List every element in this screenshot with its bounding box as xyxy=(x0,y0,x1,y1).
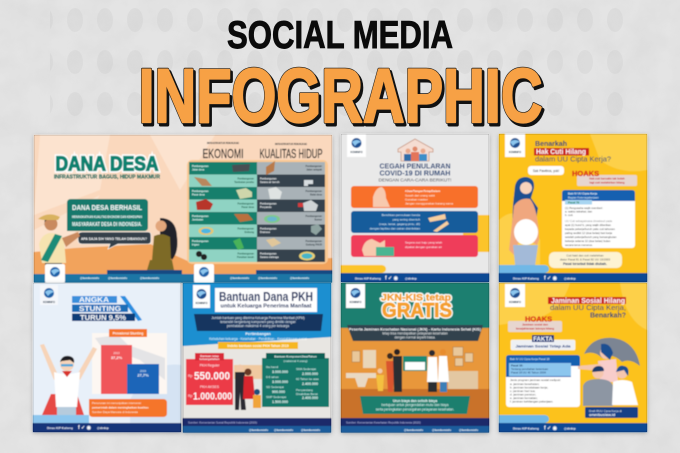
stamp: hoaks xyxy=(572,169,637,186)
icon: kominfo logo: KOMINFO xyxy=(509,301,521,304)
speech bubble: apa saja xyxy=(78,232,151,249)
document card: pasal 79: Bab IV UU Cipta Kerja xyxy=(568,192,598,196)
blue header area xyxy=(183,283,331,346)
document card: pasal 79: paling sedikit 12 (dua belas) hari kerja xyxy=(565,231,613,235)
table rows: ekonomi: Tambatan perahu xyxy=(234,181,255,184)
text band: urun biaya: serta peningkatan pencegahan pelayanan kesehatan. xyxy=(376,408,454,412)
panel: bantuan komponen: SMA Sederajat xyxy=(296,367,316,371)
icon: kominfo logo: KOMINFO xyxy=(43,301,55,304)
icon: kominfo logo: KOMINFO xyxy=(350,301,361,304)
text band: peserta JKN: tetap bisa mendapatkan pelayanan kesehatan xyxy=(382,332,448,336)
text band: urun biaya: bertujuan untuk pengendalian mutu dan biaya xyxy=(382,403,449,407)
pale blue shape xyxy=(130,364,181,423)
card: orange isolation: Susah dari orang sakit xyxy=(405,194,435,198)
panel: bantuan tetap xyxy=(186,353,233,405)
document card: pasal 18: d. jaminan pensiun; xyxy=(510,392,536,396)
heading: jaminan sosial hilang: Jaminan Sosial Hilang xyxy=(551,298,625,305)
footer: social handles: @kemkominfo xyxy=(290,276,309,280)
footer: social handles xyxy=(341,273,489,282)
panel: bantuan tetap: 1.000.000 xyxy=(193,390,232,402)
document card: pasal 79: Bagian Ketenagakerjaan xyxy=(568,196,599,200)
heading: cegah penularan xyxy=(378,164,452,184)
footer: social handles: @kemkominfo xyxy=(459,428,478,432)
document card: pasal 79: bekerja selama 12 (dua belas) bulan xyxy=(565,239,611,243)
document card: pasal 18: c. jaminan hari tua; xyxy=(510,389,536,393)
lighter yellow blobs xyxy=(499,283,647,330)
icon: kominfo logo: KOMINFO xyxy=(196,302,207,305)
footer: social handles: @dinkip xyxy=(97,426,109,430)
table rows: ekonomi: Pembangunan xyxy=(192,240,209,243)
floor area xyxy=(341,389,489,419)
bubble: pasal tersebut tidak diubah: Pasal tersebut tidak diubah. xyxy=(563,262,607,266)
speech bubble: dana desa berhasil xyxy=(67,199,148,231)
panel: bantuan komponen: Bantuan Komponen/Jiwa/Tahun xyxy=(274,354,317,358)
stamp: fakta: Jaminan Sosial Tetap Ada xyxy=(516,344,571,348)
source strip: Sumber: Kementerian Kesehatan Republik Indonesia (2020) xyxy=(346,420,421,424)
text band: urun biaya: Urun biaya dan selisih biaya xyxy=(393,399,437,403)
icon: kominfo logo xyxy=(40,285,58,305)
document card: pasal 79: Pasal 79 xyxy=(568,200,580,204)
footer: social handles: @kemkominfo xyxy=(230,276,249,280)
stamp: hoaks: HOAKS xyxy=(525,314,552,324)
yellow accent behind cards xyxy=(463,215,489,252)
infrastructure table: INFRASTRUKTUR PENUNJANG xyxy=(207,141,239,145)
heading: DANA DESA: DANA DESA xyxy=(56,154,158,176)
heading: jaminan sosial hilang: dalam UU Cipta Kerja, xyxy=(550,305,626,312)
heading: DANA DESA: DANA DESA xyxy=(56,154,158,176)
panel: bantuan dana PKH xyxy=(183,283,331,432)
panel: bantuan komponen: Ibu hamil xyxy=(266,365,279,369)
heading: benarkah hak cuti hilang: Benarkah xyxy=(535,141,567,148)
panel: JKN-KIS tetap gratis xyxy=(341,283,489,432)
heading: benarkah hak cuti hilang xyxy=(534,141,611,164)
bar chart: prevalensi stunting: 2019 xyxy=(140,369,147,373)
panel: bantuan komponen: 900.000 xyxy=(272,390,285,394)
illustration: pregnant woman xyxy=(509,177,539,273)
table rows: kualitas hidup: Pembangunan xyxy=(306,215,323,218)
footer: social handles: @kemkominfo xyxy=(249,428,268,432)
callout: orange: pemerintah dalam meningkatkan kualitas xyxy=(92,406,149,410)
stamp: hoaks: Hak cuti bersalin tak boleh xyxy=(589,176,625,180)
text band: jumlah bantuan: Pertimbangan xyxy=(245,332,271,336)
callout: orange: Sumber Daya Manusia di Indonesia xyxy=(92,410,138,414)
table rows: kualitas hidup: Drainase xyxy=(260,231,271,234)
panel: jaminan sosial hilang xyxy=(499,283,647,432)
text band: jumlah bantuan: Jumlah bantuan yang diterima Keluarga Penerima Manfaat (KPM) xyxy=(211,316,305,320)
panel: bantuan tetap: Rp xyxy=(188,374,192,378)
heading: jaminan sosial hilang: Benarkah? xyxy=(590,312,626,320)
table rows: ekonomi: Pembangunan xyxy=(192,165,209,168)
bar chart: prevalensi stunting: 2013 xyxy=(113,351,120,355)
illustration: person with cape xyxy=(40,344,97,415)
heading: angka stunting turun: TURUN 9,5% xyxy=(80,315,127,322)
document card: pasal 79: UU Cuti sebagaimana dimaksud pada xyxy=(565,219,613,223)
table rows: kualitas hidup xyxy=(257,161,325,262)
footer: social handles: @dinkip xyxy=(564,276,576,280)
footer: social handles: f ✓ ◉ xyxy=(385,276,399,282)
card: blue disinfect: (meja, lantai, gagang pintu, dll) xyxy=(379,222,420,226)
table rows: kualitas hidup: Gedung PAUD xyxy=(306,244,322,246)
panel: bantuan komponen: 60 Tahun ke atas xyxy=(296,377,319,381)
panel: angka stunting xyxy=(33,283,181,432)
icon: kominfo logo 2 xyxy=(194,264,214,283)
document card: pasal 18: Pasal 18: xyxy=(511,364,523,368)
panel: bantuan tetap: 550.000 xyxy=(194,370,230,382)
table rows: kualitas hidup: Pembangunan xyxy=(260,228,277,230)
text band: jumlah bantuan: tersendiri bergantung komponen yang dimiliki dengan xyxy=(220,320,296,324)
bar chart: prevalensi stunting: 37,2% xyxy=(111,355,123,360)
panel: bantuan komponen: 1.500.000 xyxy=(272,400,288,404)
bar chart: prevalensi stunting: 27,7% xyxy=(137,372,149,378)
source strip xyxy=(341,418,489,426)
panel: bantuan komponen xyxy=(262,353,329,407)
stamp: hoaks xyxy=(508,314,562,332)
title: SOCIAL MEDIA: SOCIAL MEDIA xyxy=(227,14,453,57)
card: orange isolation: Gunakan masker xyxy=(405,198,428,202)
label: indeks bantuan xyxy=(218,342,298,349)
document card: pasal 79: secara terus menerus. xyxy=(565,243,593,247)
callout: orange xyxy=(89,399,167,417)
infrastructure table: INFRASTRUKTUR PENUNJANG xyxy=(275,142,307,146)
lighter yellow blobs xyxy=(499,134,647,282)
stamp: hoaks: Jaminan sosial dan xyxy=(522,322,548,326)
footer: social handles: f ✓ ◉ xyxy=(544,276,558,282)
illustration: family in house xyxy=(398,139,433,161)
infrastructure table: KUALITAS HIDUP xyxy=(260,146,322,161)
footer: social handles: Dinas KIP Kalteng xyxy=(513,426,539,430)
text band: urun biaya xyxy=(360,396,470,414)
document card: pasal 79: ayat (1) huruf b, yang wajib diberikan xyxy=(565,223,611,227)
source tag xyxy=(33,415,89,423)
heading: JKN-KIS tetap gratis: JKN-KIS tetap xyxy=(381,292,451,304)
icon: kominfo logo xyxy=(505,284,525,307)
card: blue disinfect: yang sering disentuh xyxy=(392,218,420,222)
bubble: pasal tersebut tidak diubah xyxy=(549,252,622,268)
document card: pasal 79: kepada pekerja/buruh yaitu cuti tahunan xyxy=(565,227,615,231)
heading: angka stunting turun: ANGKA xyxy=(79,297,109,304)
footer: social handles: @dinkip xyxy=(405,276,417,280)
table rows: kualitas hidup: Pembangunan xyxy=(306,165,323,168)
card: blue disinfect: Bersihkan permukaan benda xyxy=(382,213,420,217)
table rows: ekonomi: Pembangunan xyxy=(192,190,209,193)
panel: bantuan komponen: 3.000.000 xyxy=(272,380,288,384)
icon: kominfo logo: KOMINFO xyxy=(509,150,521,154)
footer: social handles: @kemkominfo xyxy=(140,276,159,280)
icon: kominfo logo xyxy=(346,284,365,308)
footer: social handles: f ✓ ◉ xyxy=(544,426,558,432)
bar chart: prevalensi stunting xyxy=(92,329,167,394)
table rows: ekonomi: Pembangunan xyxy=(238,202,255,206)
table rows: ekonomi xyxy=(189,162,257,262)
label: indeks bantuan: Indeks bantuan sosial PKH Tahun 2019 xyxy=(227,344,289,348)
footer: social handles xyxy=(33,423,181,432)
title: INFOGRAPHIC: INFOGRAPHIC xyxy=(140,56,544,142)
card: orange isolation: Jangan menggunakan barang sama xyxy=(405,202,453,206)
sun rays xyxy=(34,135,215,255)
icon: kominfo logo: KOMINFO xyxy=(350,150,363,154)
footer: social handles: Dinas KIP Kalteng xyxy=(513,276,539,280)
table rows: ekonomi: Embung xyxy=(244,231,255,234)
panel: bantuan komponen: SD Sederajat xyxy=(266,385,284,389)
dark source strips xyxy=(107,270,332,274)
card: red hygiene: Segera cuci baju yang telah xyxy=(405,240,442,244)
text band: peserta JKN: Peserta Jaminan Kesehatan Nasional (JKN) - Kartu Indonesia Sehat (KIS) xyxy=(349,328,481,332)
footer: social handles: @kemkominfo xyxy=(301,428,320,432)
panel: bantuan komponen: (maksimal 4 orang) xyxy=(284,359,308,363)
callout: info box xyxy=(585,407,638,418)
document card: pasal 18 xyxy=(506,355,580,407)
heading: jaminan sosial hilang xyxy=(548,297,626,320)
source tag xyxy=(499,415,549,423)
table rows: ekonomi: Pasar desa xyxy=(241,206,255,209)
heading: bantuan dana PKH xyxy=(215,288,317,312)
heading: angka stunting turun xyxy=(72,296,142,322)
speech bubble: dana desa berhasil: DANA DESA BERHASIL xyxy=(72,203,143,212)
panel: Dana Desa xyxy=(34,135,332,283)
card: orange isolation: #JuarTanganTetapDalam xyxy=(405,189,441,193)
table rows: ekonomi: Pasar desa xyxy=(192,194,205,196)
callout: info box: omnibuslaw.id xyxy=(589,413,616,417)
icon: kominfo logo 1 xyxy=(45,264,65,283)
panel: cegah penularan COVID-19 xyxy=(341,134,489,282)
source tag xyxy=(499,265,549,273)
stamp: fakta xyxy=(511,335,575,350)
footer: social handles: @kemkominfo xyxy=(274,428,293,432)
source strip xyxy=(183,418,331,426)
icon: kominfo logo xyxy=(193,285,210,308)
table rows: ekonomi: Jembatan xyxy=(192,218,204,222)
infrastructure table: EKONOMI xyxy=(202,146,244,161)
document card: pasal 18: a. jaminan kesehatan; xyxy=(510,382,540,386)
heading: bantuan dana PKH: untuk Keluarga Penerima Manfaat xyxy=(220,304,312,310)
callout: orange: Penurunan ini menunjukkan intervensi xyxy=(92,401,141,405)
document card: pasal 79: setelah pekerja/buruh yang bersangkutan xyxy=(565,235,617,239)
table rows: kualitas hidup: Balai desa xyxy=(310,194,323,196)
speech bubble xyxy=(528,166,564,175)
table rows: ekonomi: Pembangunan xyxy=(192,215,209,218)
icon: kominfo logo xyxy=(505,134,525,157)
panel: bantuan tetap: PKH AKSES xyxy=(200,385,220,389)
footer: social handles: @kemkominfo xyxy=(80,276,99,280)
table rows: ekonomi: Jalan desa xyxy=(192,168,205,172)
footer: social handles xyxy=(341,426,489,432)
text band: peserta JKN: dengan normal seperti biasa. xyxy=(394,336,436,340)
text band: jumlah bantuan: Kebutuhan keluarga · Kesehatan · Pendidikan · Kesejahteraan sosial xyxy=(209,337,307,341)
panel: hak cuti hilang xyxy=(499,134,647,282)
illustration: man xyxy=(38,214,80,272)
panel: bantuan komponen: Penyandang xyxy=(296,388,313,392)
table rows: kualitas hidup: Pembangunan xyxy=(260,178,277,180)
callout: info box: Draft RUU Cipta Kerja di xyxy=(589,409,622,413)
table rows: kualitas hidup: Sumur xyxy=(314,218,322,222)
footer: social handles: @dinkip xyxy=(564,426,576,430)
icon: kominfo logo xyxy=(347,134,366,157)
document card: pasal 18: e. jaminan kematian; xyxy=(510,396,538,400)
card: red hygiene: dipakai dengan gunakan air xyxy=(405,245,442,249)
ground band xyxy=(34,244,332,274)
table rows: kualitas hidup: Posyandu xyxy=(260,206,272,209)
stamp: hoaks: HOAKS xyxy=(572,169,599,178)
stamp: hoaks: kesejahteraan lainnya hilang xyxy=(516,326,554,330)
card: orange isolation xyxy=(351,186,478,208)
text band: jumlah bantuan xyxy=(194,314,323,341)
source strip: Sumber: Kementerian Sosial Republik Indonesia (2019) xyxy=(188,420,257,424)
table rows: kualitas hidup: Sarana air bersih xyxy=(260,181,280,184)
document card: pasal 79 xyxy=(562,190,635,248)
speech bubble: apa saja: APA SAJA SIH YANG TELAH DIBANGUN? xyxy=(81,237,148,241)
table rows: ekonomi: Pembangunan xyxy=(238,228,255,230)
source tag xyxy=(341,265,386,273)
document card: pasal 18: b. jaminan kecelakaan kerja; xyxy=(510,386,548,390)
illustration: people under umbrella xyxy=(578,338,640,406)
table rows: kualitas hidup: Sarana olahraga xyxy=(260,256,279,259)
table rows: ekonomi: Penahan tanah xyxy=(237,256,255,259)
speech bubble: dana desa berhasil: MENINGKATKAN KUALITAS EKONOMI DAN KEHIDUPAN xyxy=(72,215,142,219)
panel: bantuan tetap: keluarga/tahun xyxy=(200,357,220,361)
bar chart: prevalensi stunting: Prevalensi Stunting xyxy=(113,332,143,336)
panel: bantuan komponen: 2.400.000 xyxy=(302,396,318,400)
document card: pasal 79: a. waktu istirahat; dan xyxy=(565,210,593,214)
footer: social handles xyxy=(499,273,647,282)
heading: JKN-KIS tetap gratis: GRATIS xyxy=(382,300,452,322)
table rows: kualitas hidup: Pembangunan xyxy=(260,252,277,256)
speech bubble: dana desa berhasil: MASYARAKAT DESA DI INDONESIA. xyxy=(72,222,142,228)
table rows: kualitas hidup: Pembangunan xyxy=(306,240,323,243)
document card: pasal 18: Pasal 18 UU 40 Tahun 2004 xyxy=(511,370,546,374)
panel: bantuan komponen: SMP Sederajat xyxy=(266,395,286,399)
document card: pasal 79: b. cuti. xyxy=(565,213,573,217)
footer: social handles xyxy=(34,274,332,282)
document card: pasal 18: Jenis program jaminan sosial meliputi: xyxy=(510,378,561,382)
heading: cegah penularan: CEGAH PENULARAN xyxy=(380,164,450,170)
title: INFOGRAPHIC: INFOGRAPHIC xyxy=(138,54,542,139)
footer: social handles: Dinas KIP Kalteng xyxy=(355,276,381,280)
heading: bantuan dana PKH: Bantuan Dana PKH xyxy=(219,290,313,304)
card: blue disinfect xyxy=(351,211,478,233)
heading: cegah penularan: COVID-19 DI RUMAH xyxy=(380,170,450,178)
table rows: ekonomi: Pembangunan xyxy=(238,252,255,256)
footer: social handles: @kemkominfo xyxy=(432,428,451,432)
table rows: kualitas hidup: Pembangunan xyxy=(306,190,323,193)
panel: bantuan komponen: 2.400.000 xyxy=(302,382,318,386)
bubble: pasal tersebut tidak diubah: diatur Pasal 81 & Pasal 82 UU 13/2003 xyxy=(560,258,611,262)
infrastructure table xyxy=(187,141,328,264)
footer: social handles xyxy=(499,423,647,432)
text band: jumlah bantuan: pembatasan maksimal 4 orang per keluarga xyxy=(227,324,289,328)
panel: bantuan komponen: 2.000.000 xyxy=(302,372,318,376)
teal header area xyxy=(341,283,489,328)
footer: social handles: @kemkominfo xyxy=(108,276,127,280)
stamp: fakta: FAKTA xyxy=(533,337,553,343)
document card: pasal 18: Bab IV UU Cipta Kerja Pasal 18 xyxy=(510,357,550,361)
table rows: kualitas hidup: Pembangunan xyxy=(260,202,277,206)
illustration: family xyxy=(234,364,262,410)
bubble: pasal tersebut tidak diubah: Cuti haid dan cuti melahirkan xyxy=(566,254,604,258)
card: blue disinfect: dengan lap/tisu dan cairan disinfektan xyxy=(370,226,420,230)
heading: JKN-KIS tetap gratis: JKN-KIS tetap xyxy=(381,292,451,304)
panel: bantuan tetap: Rp xyxy=(188,394,192,398)
panel: bantuan tetap: PKH Reguler xyxy=(200,364,220,368)
speech bubble: Sak Pawitros, yuk! xyxy=(533,169,559,173)
card: red hygiene xyxy=(351,235,478,257)
heading: benarkah hak cuti hilang: dalam UU Cipta Kerja? xyxy=(535,156,611,164)
table rows: ekonomi: Irigasi xyxy=(192,244,199,246)
heading: cegah penularan: DENGAN CARA-CARA BERIKUT! xyxy=(378,178,452,184)
panel: bantuan tetap: Bantuan tetap xyxy=(200,354,219,358)
table rows: kualitas hidup: Jalan setapak xyxy=(306,168,323,172)
document card: pasal 18: Tentang perubahan ketentuan xyxy=(511,367,549,371)
table rows: ekonomi: Pembangunan xyxy=(238,178,255,180)
illustration: clinic furniture xyxy=(346,347,478,389)
heading: angka stunting turun: STUNTING xyxy=(79,306,122,313)
footer: social handles: f ✓ ◉ xyxy=(78,425,92,431)
footer: social handles: @kemkominfo xyxy=(258,276,277,280)
panel: bantuan komponen: 0-6 tahun xyxy=(266,375,279,379)
heading: benarkah hak cuti hilang: Hak Cuti Hilang xyxy=(536,149,586,156)
illustration: family and doctors with card xyxy=(376,349,449,392)
illustration: woman xyxy=(147,218,177,270)
footer: social handles: Dinas KIP Kalteng xyxy=(47,426,73,430)
panel: bantuan komponen: 3.000.000 xyxy=(272,370,288,374)
stamp: hoaks: lagi cuti melahirkan hilang xyxy=(589,180,625,184)
heading: JKN-KIS tetap gratis: GRATIS xyxy=(382,300,452,322)
heading: DANA DESA: INFRASTRUKTUR BAGUS, HIDUP MAKMUR xyxy=(54,174,160,180)
panel: bantuan komponen: Disabilitas Berat xyxy=(296,392,318,396)
document card: pasal 79: (1) Pengusaha wajib memberi: xyxy=(565,206,603,210)
footer: social handles: @kemkominfo xyxy=(404,428,423,432)
document card: pasal 18: f. jaminan kehilangan pekerjaan. xyxy=(510,400,553,404)
footer: social handles xyxy=(183,426,331,432)
text band: peserta JKN xyxy=(347,325,483,341)
title: INFOGRAPHIC: INFOGRAPHIC xyxy=(138,54,542,139)
